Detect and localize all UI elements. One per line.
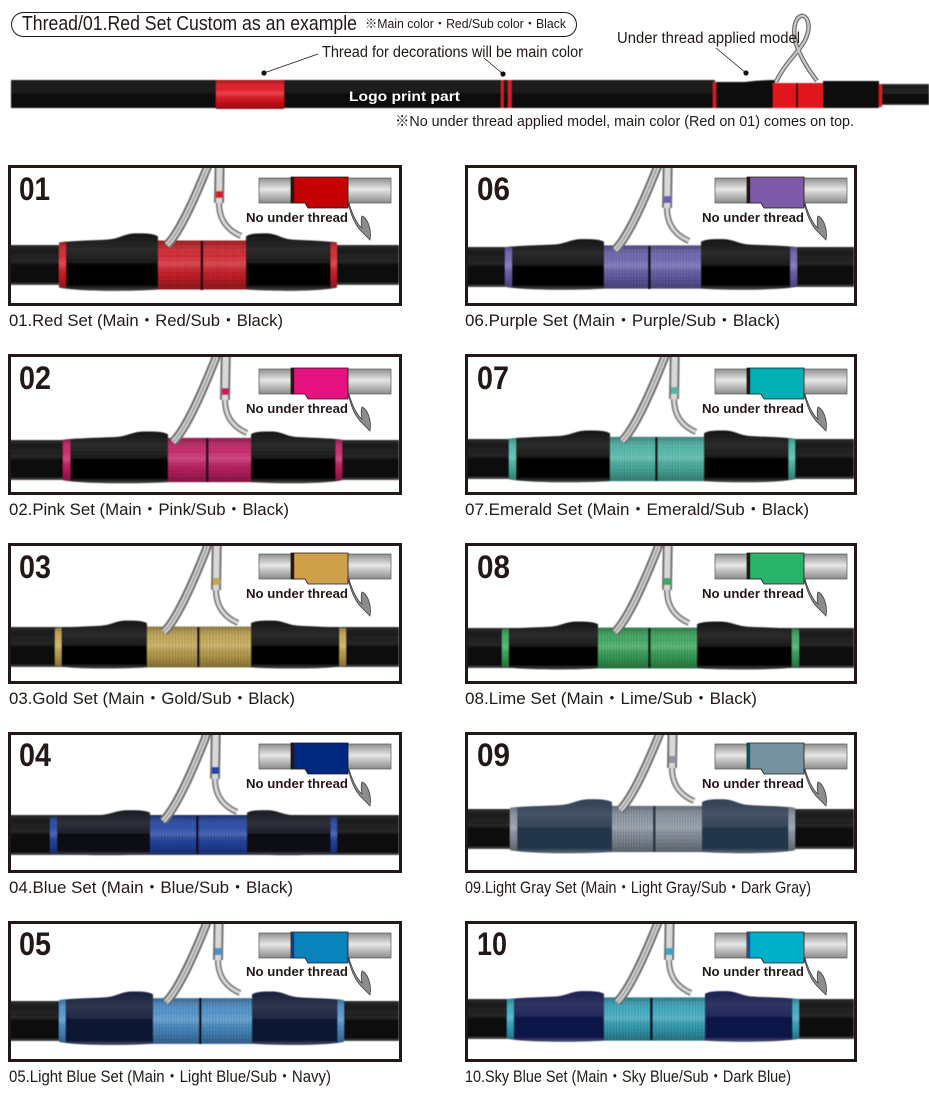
inset diagram bbox=[715, 368, 847, 431]
inset diagram bbox=[715, 177, 847, 240]
caption: 02.Pink Set (Main・Pink/Sub・Black) bbox=[9, 501, 289, 519]
inset diagram bbox=[715, 932, 847, 995]
inset label: No under thread bbox=[702, 210, 804, 225]
rod photo bbox=[8, 338, 399, 483]
number: 09 bbox=[477, 737, 510, 773]
rod photo bbox=[8, 898, 399, 1045]
panel 04 blue bbox=[8, 732, 402, 897]
number: 05 bbox=[19, 926, 51, 962]
callout: under thread: Under thread applied model bbox=[617, 30, 800, 47]
number: 02 bbox=[19, 360, 51, 396]
callout: under thread bbox=[617, 30, 800, 76]
number: 06 bbox=[477, 171, 510, 207]
caption: 01.Red Set (Main・Red/Sub・Black) bbox=[9, 312, 283, 330]
rod photo bbox=[465, 898, 854, 1042]
panel border bbox=[10, 356, 400, 494]
logo label: Logo print part bbox=[349, 89, 461, 104]
inset label: No under thread bbox=[702, 964, 804, 979]
panel 01 red bbox=[8, 165, 402, 330]
rod photo bbox=[465, 706, 854, 853]
panel border bbox=[10, 544, 400, 682]
panel 02 pink bbox=[8, 354, 402, 519]
rod photo bbox=[465, 146, 854, 290]
caption: 04.Blue Set (Main・Blue/Sub・Black) bbox=[9, 879, 293, 897]
rod photo bbox=[8, 141, 399, 291]
rod photo bbox=[465, 528, 854, 670]
inset diagram bbox=[715, 553, 847, 616]
number: 04 bbox=[19, 737, 51, 773]
panel border bbox=[10, 734, 400, 872]
number: 03 bbox=[19, 549, 51, 585]
caption: 03.Gold Set (Main・Gold/Sub・Black) bbox=[9, 690, 295, 708]
panel 05 light blue bbox=[8, 921, 402, 1086]
callout: decoration thread: Thread for decorations will be main color bbox=[322, 44, 583, 61]
panel border bbox=[466, 922, 856, 1060]
panel 10 sky blue bbox=[465, 921, 857, 1086]
inset diagram bbox=[259, 932, 391, 995]
panel border bbox=[466, 734, 856, 872]
title pill bbox=[12, 12, 576, 36]
rod photo bbox=[8, 717, 399, 855]
title pill: ※Main color・Red/Sub color・Black bbox=[365, 17, 567, 31]
panel border bbox=[10, 166, 400, 304]
rod with decoration threads bbox=[11, 80, 929, 109]
number: 07 bbox=[477, 360, 509, 396]
note: ※No under thread applied model, main color (Red on 01) comes on top. bbox=[395, 113, 854, 130]
inset diagram bbox=[259, 553, 391, 616]
rod photo bbox=[8, 528, 399, 669]
inset diagram bbox=[259, 177, 391, 240]
panel 03 gold bbox=[8, 543, 402, 708]
panel 07 emerald bbox=[465, 354, 857, 519]
caption: 07.Emerald Set (Main・Emerald/Sub・Black) bbox=[465, 501, 809, 519]
caption: 05.Light Blue Set (Main・Light Blue/Sub・Navy) bbox=[9, 1068, 331, 1086]
caption: 10.Sky Blue Set (Main・Sky Blue/Sub・Dark Blue) bbox=[465, 1068, 791, 1086]
panel border bbox=[10, 922, 400, 1060]
inset label: No under thread bbox=[246, 586, 348, 601]
caption: 06.Purple Set (Main・Purple/Sub・Black) bbox=[465, 312, 780, 330]
guide ring bbox=[776, 16, 817, 82]
caption: 09.Light Gray Set (Main・Light Gray/Sub・Dark Gray) bbox=[465, 879, 811, 897]
inset label: No under thread bbox=[246, 210, 348, 225]
inset label: No under thread bbox=[702, 586, 804, 601]
panel border bbox=[466, 356, 856, 494]
panel 08 lime bbox=[465, 543, 857, 708]
inset label: No under thread bbox=[246, 401, 348, 416]
panel border bbox=[466, 166, 856, 304]
inset label: No under thread bbox=[702, 401, 804, 416]
inset diagram bbox=[259, 743, 391, 806]
panel 09 light gray bbox=[465, 732, 857, 897]
inset label: No under thread bbox=[702, 776, 804, 791]
caption: 08.Lime Set (Main・Lime/Sub・Black) bbox=[465, 690, 757, 708]
inset label: No under thread bbox=[246, 776, 348, 791]
inset label: No under thread bbox=[246, 964, 348, 979]
panel border bbox=[466, 544, 856, 682]
number: 08 bbox=[477, 549, 510, 585]
callout: decoration thread bbox=[261, 44, 583, 77]
panel 06 purple bbox=[465, 165, 857, 330]
title pill: Thread/01.Red Set Custom as an example bbox=[22, 13, 357, 35]
inset diagram bbox=[259, 368, 391, 431]
rod photo bbox=[465, 337, 854, 482]
number: 10 bbox=[477, 926, 507, 962]
number: 01 bbox=[19, 171, 50, 207]
inset diagram bbox=[715, 743, 847, 806]
header rod diagram bbox=[10, 12, 929, 130]
